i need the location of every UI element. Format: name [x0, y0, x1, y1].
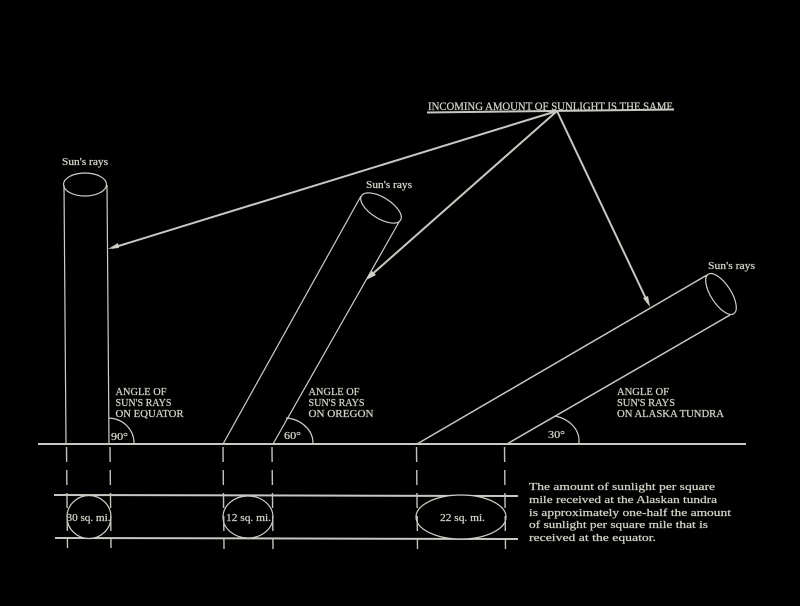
- label: angle on Alaska tundra: [617, 387, 724, 420]
- angle marker: 90 degrees: [109, 418, 134, 443]
- label: angle on Alaska tundra: SUN'S RAYS: [617, 398, 675, 409]
- Oregon sun beam: [223, 187, 406, 444]
- label: angle on equator: ON EQUATOR: [116, 409, 184, 420]
- label: angle on Oregon: ANGLE OF: [308, 387, 360, 398]
- area: Alaska 22 sq. mi.: 22 sq. mi.: [440, 513, 485, 524]
- label: angle on Alaska tundra: ANGLE OF: [617, 387, 669, 398]
- explanatory text: mile received at the Alaskan tundra: [529, 494, 717, 506]
- angle marker: 30 degrees: [548, 416, 579, 443]
- label: angle on Oregon: ON OREGON: [308, 409, 374, 420]
- label: angle on Oregon: SUN'S RAYS: [308, 398, 365, 409]
- arrow: to Alaska beam: [557, 111, 650, 307]
- angle marker: 60 degrees: [284, 418, 313, 443]
- area: equator 30 sq. mi.: 30 sq. mi.: [66, 513, 110, 524]
- angle marker: 60 degrees: 60°: [284, 431, 301, 442]
- angle marker: 90 degrees: 90°: [111, 432, 128, 443]
- area: equator 30 sq. mi.: [66, 496, 111, 538]
- Alaska sun beam: [417, 269, 742, 444]
- upper area boundary: [54, 495, 518, 496]
- equator sun beam: [64, 173, 109, 444]
- title: incoming amount of sunlight: INCOMING AMOUNT OF SUNLIGHT IS THE SAME: [428, 99, 673, 113]
- label: angle on Alaska tundra: ON ALASKA TUNDRA: [617, 409, 724, 420]
- explanatory text: [529, 481, 731, 544]
- sun's rays label: Alaska: Sun's rays: [708, 261, 755, 272]
- sun's rays label: equator: Sun's rays: [62, 157, 108, 168]
- ground line: [38, 443, 746, 445]
- area: Alaska 22 sq. mi.: [416, 495, 506, 539]
- explanatory text: received at the equator.: [529, 532, 656, 544]
- sun's rays label: Oregon: Sun's rays: [366, 180, 412, 191]
- lower area boundary: [55, 538, 518, 539]
- area: Oregon 12 sq. mi.: [223, 496, 273, 538]
- dashed projection lines: [66, 447, 506, 549]
- angle marker: 30 degrees: 30°: [548, 430, 565, 441]
- explanatory text: of sunlight per square mile that is: [529, 519, 708, 531]
- arrow: to Oregon beam: [366, 111, 557, 280]
- explanatory text: The amount of sunlight per square: [529, 481, 715, 493]
- label: angle on Oregon: [308, 387, 374, 420]
- label: angle on equator: SUN'S RAYS: [116, 398, 172, 409]
- label: angle on equator: [116, 387, 184, 420]
- explanatory text: is approximately one-half the amount: [529, 507, 731, 519]
- label: angle on equator: ANGLE OF: [116, 387, 167, 398]
- area: Oregon 12 sq. mi.: 12 sq. mi.: [226, 513, 271, 524]
- arrow: to equator beam: [108, 111, 557, 249]
